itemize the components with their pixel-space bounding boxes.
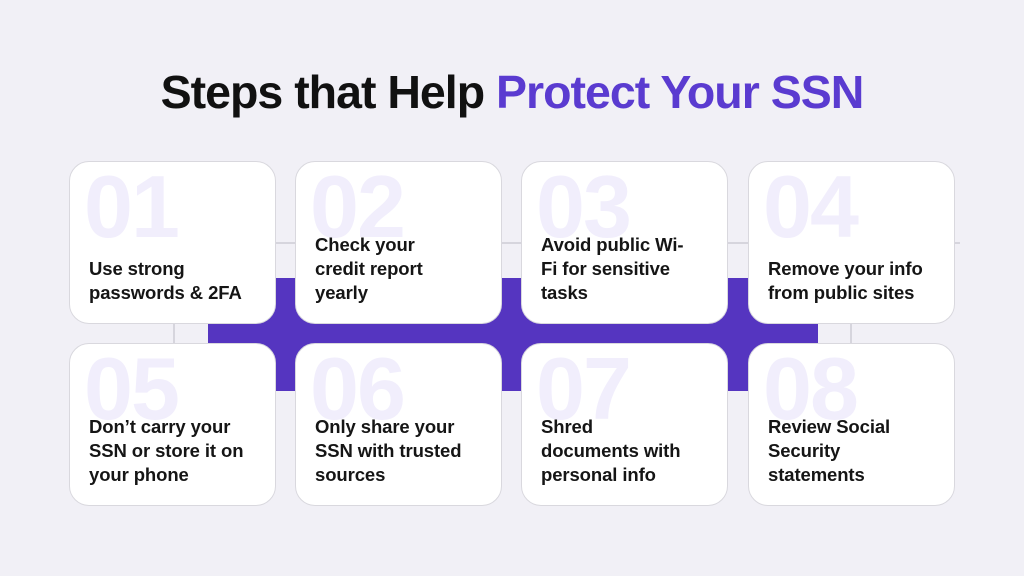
card 02: credit report — [315, 258, 423, 279]
card 05 — [69, 343, 276, 506]
card 05: your phone — [89, 464, 189, 485]
card 08: statements — [768, 464, 865, 485]
card 08: Security — [768, 440, 840, 461]
card 03: tasks — [541, 282, 588, 303]
card 08 — [748, 343, 955, 506]
card 07 — [521, 343, 728, 506]
card 03: Fi for sensitive — [541, 258, 670, 279]
title: Steps that Help Protect Your SSN — [161, 66, 863, 118]
card 03 — [521, 161, 728, 324]
card 07: Shred — [541, 416, 593, 437]
card 01: Use strong — [89, 258, 185, 279]
card 02: Check your — [315, 234, 415, 255]
card 05: Don’t carry your — [89, 416, 230, 437]
card 06: SSN with trusted — [315, 440, 461, 461]
card 02: yearly — [315, 282, 368, 303]
card 07: personal info — [541, 464, 656, 485]
card 04: from public sites — [768, 282, 914, 303]
card 06: sources — [315, 464, 385, 485]
card 04: Remove your info — [768, 258, 923, 279]
card 02 — [295, 161, 502, 324]
card 05: SSN or store it on — [89, 440, 243, 461]
card 08: Review Social — [768, 416, 890, 437]
card 06: Only share your — [315, 416, 454, 437]
card 06 — [295, 343, 502, 506]
card 01 — [69, 161, 276, 324]
card 07: documents with — [541, 440, 680, 461]
card 01: passwords & 2FA — [89, 282, 242, 303]
card 04 — [748, 161, 955, 324]
card 03: Avoid public Wi- — [541, 234, 683, 255]
purple connector band — [208, 278, 818, 391]
